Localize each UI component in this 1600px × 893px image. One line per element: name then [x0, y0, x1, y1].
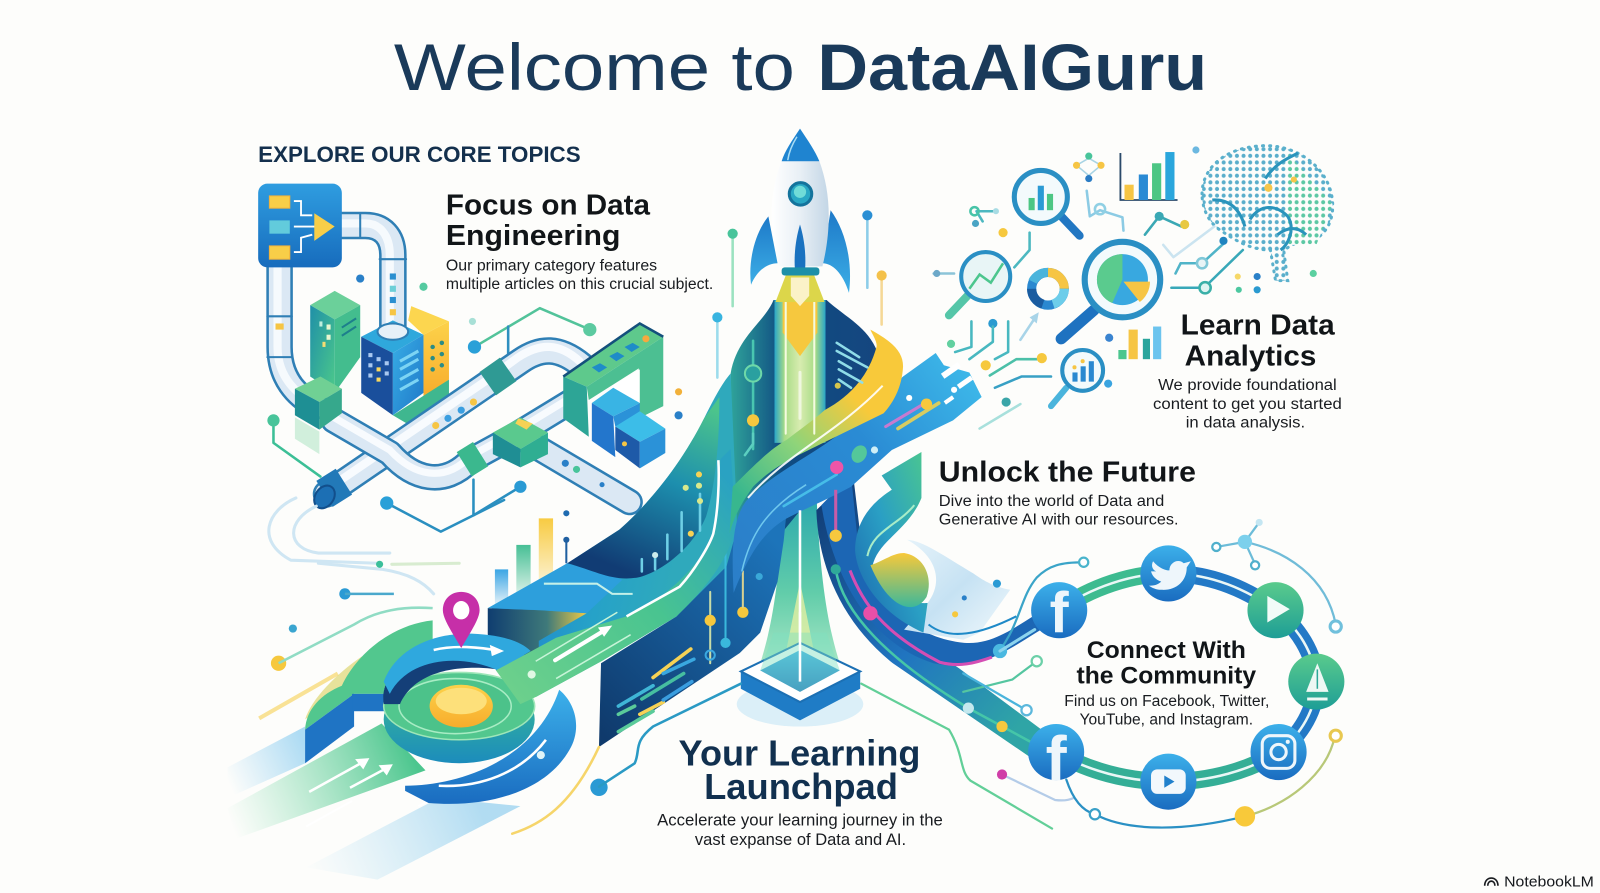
launch disc and location pin: [259, 592, 631, 804]
yellow launch centre: [430, 685, 493, 728]
connector lines: [861, 519, 1341, 829]
blue top arc: [384, 634, 531, 694]
small bar chart: [1118, 327, 1161, 359]
title: DataAIGuru: [817, 31, 1207, 105]
magnifier: small bars: [1051, 350, 1103, 406]
centre fin: [795, 224, 805, 298]
flame top: [776, 276, 824, 302]
blue data ribbon: [733, 353, 982, 593]
yellow fading swoosh: [259, 673, 338, 718]
rocket body: [772, 161, 829, 266]
icon: twitter: [1140, 545, 1196, 602]
icon: facebook lower: f: [1046, 725, 1068, 795]
text: focus on data engineering: Our primary category features: [446, 257, 658, 274]
building: green tower: [310, 291, 360, 393]
magnifier: line chart: [949, 252, 1010, 315]
text: your learning launchpad: Accelerate your learning journey in the: [657, 812, 943, 830]
beam column: [760, 490, 840, 663]
text: focus on data engineering: multiple articles on this crucial subject.: [446, 276, 713, 293]
text: your learning launchpad: Your Learning: [679, 733, 920, 773]
icon: play button: [1247, 582, 1304, 638]
building: yellow tower: [408, 306, 449, 398]
icon: youtube: [1140, 754, 1196, 810]
icon: instagram: [1251, 724, 1307, 780]
central dark body: [731, 300, 878, 531]
text: your learning launchpad: [657, 733, 943, 849]
pale swooshes and tail lines: [269, 498, 459, 594]
tunnel under ribbon: [488, 608, 587, 663]
code panel: [599, 510, 787, 747]
illustration: data analytics icons: [933, 146, 1333, 429]
section heading: explore our core topics: EXPLORE OUR CORE TOPICS: [258, 142, 581, 167]
text: connect with the community: the Community: [1077, 663, 1257, 690]
text: unlock the future: Generative AI with our resources.: [939, 511, 1179, 528]
green launch road: [496, 449, 736, 697]
donut chart: [1032, 272, 1064, 305]
text: focus on data engineering: [446, 189, 713, 293]
right ribbon data line: [830, 490, 1031, 742]
pale swoosh: [904, 540, 1010, 640]
left ribbon base: [492, 373, 737, 697]
pipe junction block: [493, 417, 548, 467]
magnifier: bar chart: [1014, 170, 1080, 236]
flame chevron: [783, 300, 817, 356]
text: connect with the community: Find us on Facebook, Twitter,: [1064, 693, 1269, 710]
loop highlight: [1056, 573, 1316, 782]
small green cube: [295, 377, 342, 454]
dark pocket with bars: [567, 397, 719, 578]
illustration: data engineering pipelines: [258, 184, 683, 671]
text: connect with the community: YouTube, and Instagram.: [1080, 711, 1253, 728]
icon: facebook upper: f: [1050, 582, 1070, 646]
connector lines around pipelines: [267, 274, 683, 532]
stems around rocket: [712, 210, 887, 378]
fading launch stripes: [228, 723, 520, 880]
text: learn data analytics: Analytics: [1185, 340, 1316, 372]
top bar chart: [1120, 152, 1178, 200]
launch beam highlight: [784, 510, 816, 684]
yellow blob: [870, 553, 929, 607]
illustration: central launch ribbons: [488, 300, 1055, 756]
unlock the future leaf and swoosh: [855, 452, 1016, 640]
icon: facebook lower: [1028, 724, 1084, 795]
rocket window: [789, 183, 812, 205]
blue lower right arc: [405, 690, 576, 804]
launchpad connector lines: [512, 684, 741, 834]
loop band: green sections: [1058, 573, 1168, 610]
right fin: [822, 210, 850, 293]
icon: workflow box: [258, 184, 342, 267]
text: your learning launchpad: vast expanse of Data and AI.: [695, 831, 906, 849]
blue cubes: [592, 388, 665, 468]
road stub onto disc: [496, 616, 627, 704]
icon: pen nib: [1288, 654, 1344, 710]
blue green leaf: [855, 452, 928, 633]
notebooklm badge: NotebookLM: [1504, 875, 1594, 891]
brain: [1202, 146, 1333, 281]
blue upper wall: [383, 653, 518, 704]
illustration: community loop: [861, 519, 1344, 829]
back left green arc: [305, 620, 433, 730]
rocket: [750, 129, 850, 306]
green disc side: [384, 676, 535, 763]
small connector dots: [271, 561, 433, 671]
building: blue data centre: [361, 320, 449, 426]
body detail lines: [745, 300, 867, 455]
text: unlock the future: Unlock the Future: [939, 457, 1196, 489]
title: [394, 31, 1207, 105]
pipe: top elbow: [332, 214, 406, 332]
pipe: left vertical: [267, 260, 316, 406]
magnifier: pie chart: [1061, 242, 1160, 339]
chart: rising bars behind launch road: [495, 518, 569, 610]
rocket nose: [782, 129, 819, 161]
text: learn data analytics: We provide foundational: [1158, 377, 1337, 394]
ribbon data dots: [830, 362, 973, 474]
text: learn data analytics: content to get you started: [1153, 396, 1342, 413]
text: unlock the future: [939, 457, 1196, 528]
right ribbon upper to community: [821, 474, 1043, 666]
text: learn data analytics: Learn Data: [1181, 310, 1336, 342]
text: unlock the future: Dive into the world of Data and: [939, 493, 1164, 510]
right ribbon lower to community: [816, 474, 1055, 756]
text: your learning launchpad: Launchpad: [704, 767, 898, 807]
text: learn data analytics: [1153, 310, 1342, 432]
pipe: lower run: [334, 396, 630, 502]
text: connect with the community: Connect With: [1087, 637, 1246, 664]
loop band: blue sections: [1168, 573, 1316, 752]
pipe: main diagonal: [310, 347, 582, 512]
yellow green ribbon: [730, 330, 903, 534]
text: focus on data engineering: Focus on Data: [446, 189, 651, 221]
text: connect with the community: [1064, 637, 1269, 728]
green disc top surface: [384, 672, 535, 740]
flame column: [774, 300, 826, 443]
analytics connector network: [933, 146, 1317, 429]
text: learn data analytics: in data analysis.: [1186, 415, 1305, 432]
text: focus on data engineering: Engineering: [446, 220, 620, 252]
launch pad: [737, 612, 863, 727]
map pin: [443, 592, 480, 648]
pipeline gate: [563, 323, 663, 437]
left fin: [750, 216, 778, 285]
title: Welcome to: [394, 31, 795, 105]
icon: facebook upper: [1031, 582, 1087, 646]
